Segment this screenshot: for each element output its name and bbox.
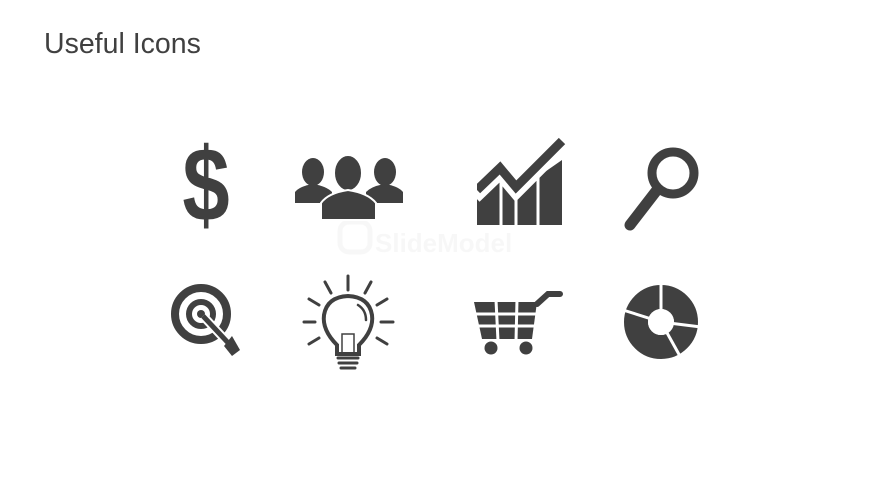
icon: target (175, 288, 240, 356)
icon: growth chart (470, 140, 564, 230)
icon: shopping cart (474, 294, 560, 354)
watermark: SlideModel (375, 228, 512, 258)
icon: donut chart (623, 282, 701, 358)
title: Useful Icons (44, 28, 201, 60)
icon: light bulb (304, 276, 393, 368)
icon: magnifier (630, 152, 694, 225)
icon: dollar: $ (182, 127, 230, 244)
icon: people (295, 155, 403, 220)
watermark (340, 222, 512, 258)
